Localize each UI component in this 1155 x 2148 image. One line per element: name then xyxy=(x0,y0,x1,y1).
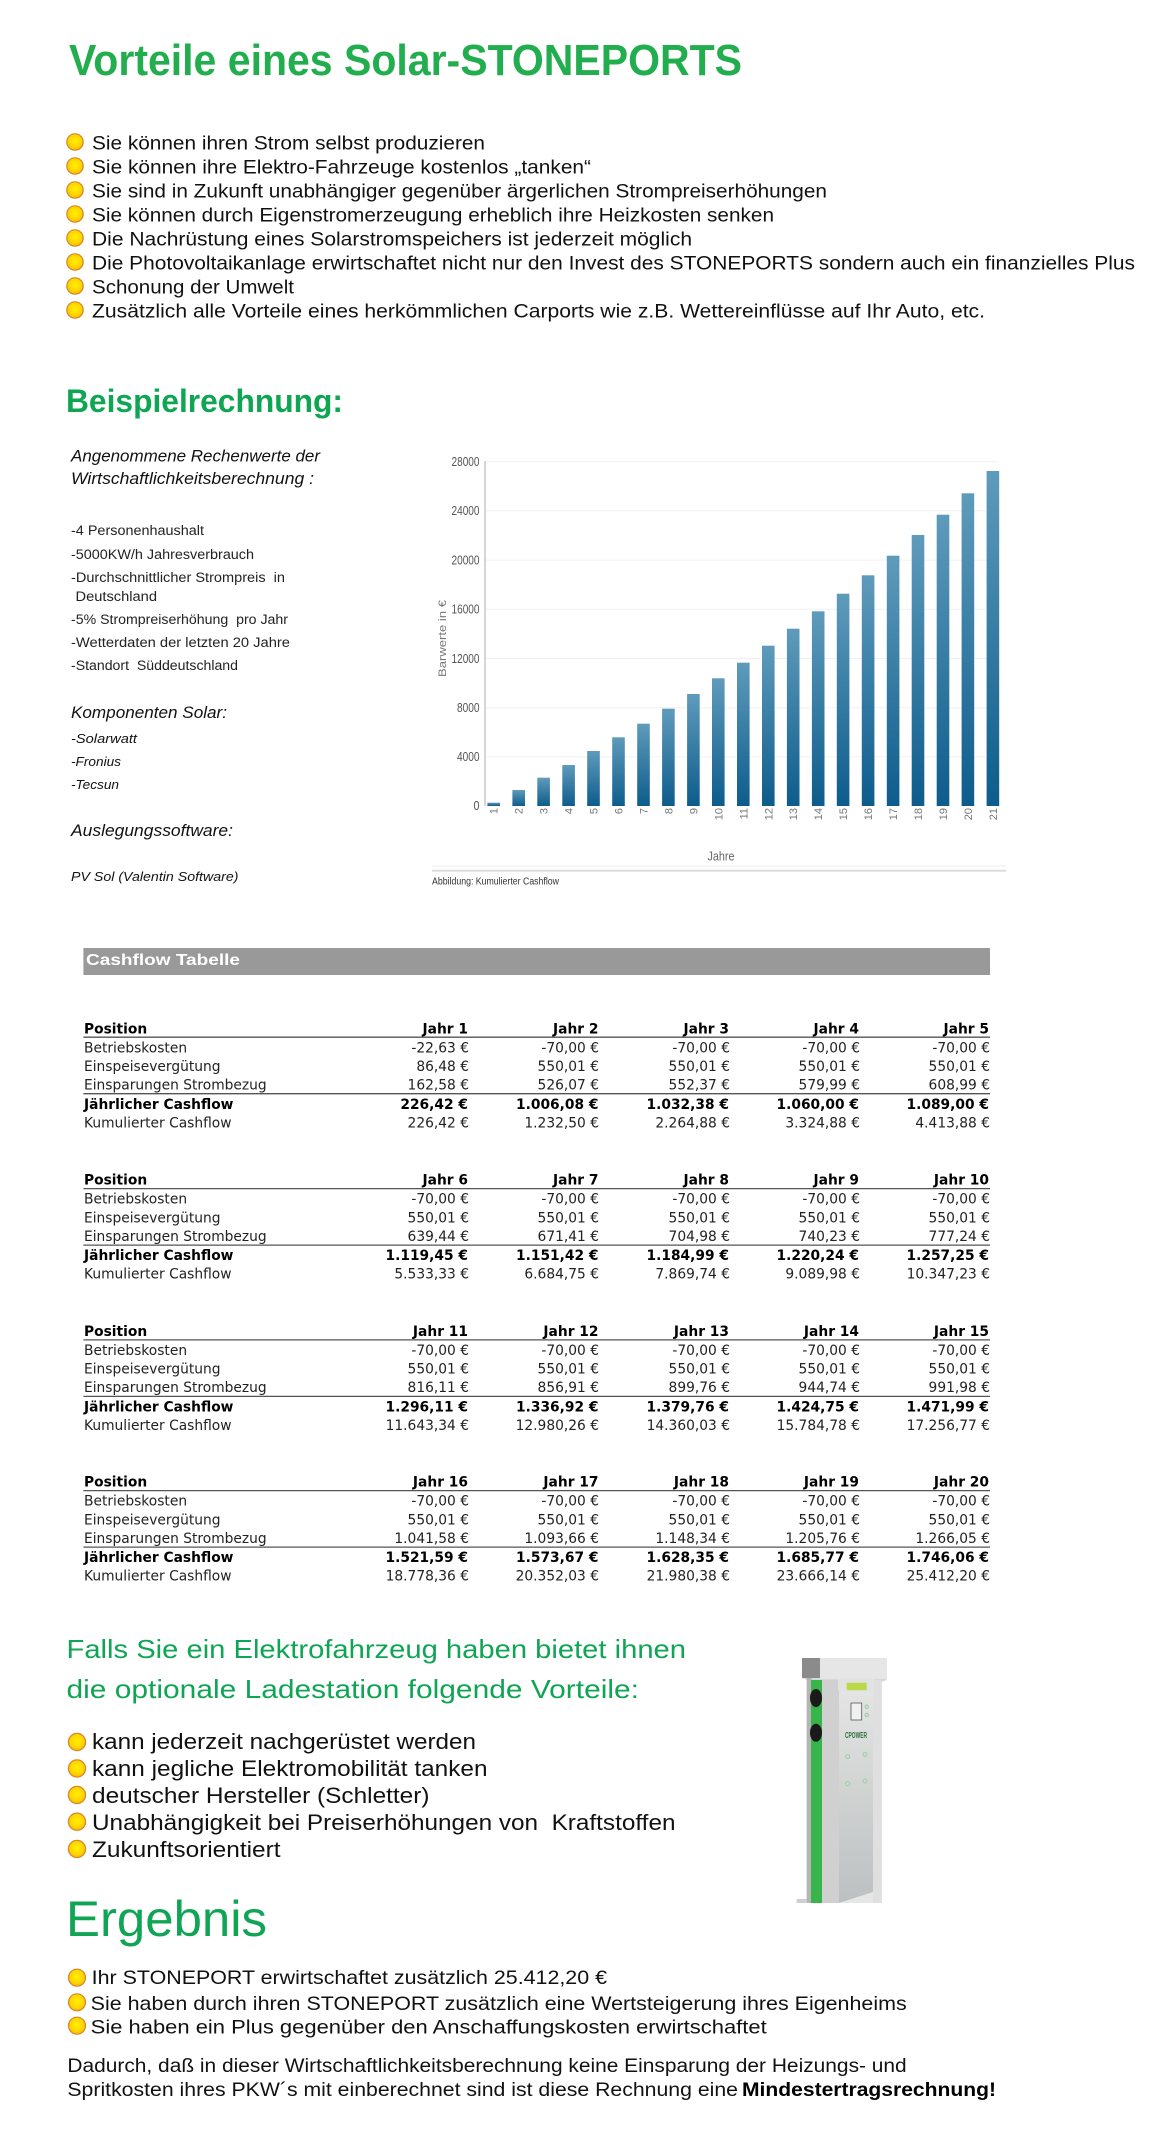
table: years 1 to 5: Jahr 2 xyxy=(552,1021,598,1037)
table: years 11 to 15: Einsparungen Strombezug xyxy=(84,1380,267,1396)
icon: bullet xyxy=(68,1969,86,1986)
x axis labels: 7 xyxy=(638,808,650,814)
x axis labels: 17 xyxy=(888,808,900,820)
benefit text: Sie sind in Zukunft unabhängiger gegenüber ärgerlichen Strompreiserhöhungen xyxy=(92,180,827,202)
y axis labels: 0 xyxy=(474,799,480,813)
table: years 11 to 15 xyxy=(83,1324,990,1434)
table: years 1 to 5: -22,63 € xyxy=(411,1040,469,1056)
assumption: -4 Personenhaushalt xyxy=(71,523,204,538)
table: years 1 to 5: 2.264,88 € xyxy=(655,1115,730,1131)
assumption: -Durchschnittlicher Strompreis in xyxy=(71,570,285,585)
list: results xyxy=(68,1967,907,2038)
table: years 16 to 20: Jahr 16 xyxy=(412,1475,468,1491)
x axis labels: 2 xyxy=(514,808,526,814)
x axis labels: 8 xyxy=(663,808,675,814)
display xyxy=(838,1678,874,1692)
table: years 1 to 5: Jahr 5 xyxy=(943,1021,989,1037)
x axis labels: 6 xyxy=(614,808,626,814)
table: years 11 to 15: Kumulierter Cashflow xyxy=(84,1418,232,1434)
software name: PV Sol (Valentin Software) xyxy=(71,869,238,884)
icon: bullet xyxy=(67,230,83,246)
table: years 1 to 5: Jahr 3 xyxy=(683,1021,729,1037)
table: years 1 to 5: 86,48 € xyxy=(416,1059,469,1075)
x axis labels: 10 xyxy=(713,808,725,820)
table: years 11 to 15: 991,98 € xyxy=(929,1380,990,1396)
table: years 6 to 10: 5.533,33 € xyxy=(394,1267,469,1283)
table: years 6 to 10: -70,00 € xyxy=(932,1192,990,1208)
card reader xyxy=(851,1703,862,1720)
assumptions heading line 2: Wirtschaftlichkeitsberechnung : xyxy=(71,469,314,488)
conclusion text: Mindestertragsrechnung! xyxy=(742,2080,996,2101)
component: -Fronius xyxy=(71,754,122,769)
table: years 11 to 15: 14.360,03 € xyxy=(647,1418,730,1434)
table: years 11 to 15: 1.471,99 € xyxy=(906,1400,989,1416)
icon: bullet xyxy=(68,1813,86,1830)
table: years 16 to 20: -70,00 € xyxy=(541,1494,599,1510)
icon: bullet xyxy=(68,1786,86,1804)
table: years 1 to 5: 3.324,88 € xyxy=(785,1115,860,1131)
bar chart: cumulative cashflow xyxy=(432,455,1006,888)
table: years 11 to 15: 1.296,11 € xyxy=(386,1400,468,1416)
table: years 16 to 20: 1.041,58 € xyxy=(394,1531,469,1547)
table: years 16 to 20: -70,00 € xyxy=(932,1494,990,1510)
icon: bullet xyxy=(68,1994,86,2011)
y axis labels: 16000 xyxy=(452,603,480,617)
table: years 1 to 5: -70,00 € xyxy=(541,1040,599,1056)
table: years 1 to 5: 1.060,00 € xyxy=(776,1097,859,1113)
table: years 6 to 10: Jährlicher Cashflow xyxy=(83,1248,234,1264)
heading: Ergebnis: Ergebnis xyxy=(66,1891,267,1947)
table: years 6 to 10: 550,01 € xyxy=(669,1210,730,1226)
icon: bullet xyxy=(68,2017,86,2034)
table: years 6 to 10: 1.220,24 € xyxy=(776,1248,859,1264)
table: years 11 to 15: 1.336,92 € xyxy=(516,1400,598,1416)
image: charging station xyxy=(797,1658,887,1903)
table: years 1 to 5: -70,00 € xyxy=(932,1040,990,1056)
table: years 11 to 15: 944,74 € xyxy=(799,1380,860,1396)
table: years 6 to 10: -70,00 € xyxy=(802,1192,860,1208)
result text: Sie haben durch ihren STONEPORT zusätzlich eine Wertsteigerung ihres Eigenheims xyxy=(91,1993,907,2015)
table: years 11 to 15: Betriebskosten xyxy=(84,1343,187,1359)
table: years 16 to 20: 18.778,36 € xyxy=(386,1569,469,1585)
table: years 11 to 15: Jahr 14 xyxy=(803,1324,859,1340)
icon: bullet xyxy=(67,134,83,150)
table: years 1 to 5 xyxy=(83,1021,990,1131)
table: years 11 to 15: 1.379,76 € xyxy=(646,1400,729,1416)
table: years 16 to 20: 1.628,35 € xyxy=(646,1550,729,1566)
heading: Beispielrechnung: Beispielrechnung: xyxy=(66,383,343,419)
benefit text: deutscher Hersteller (Schletter) xyxy=(92,1783,430,1808)
benefit text: Sie können ihren Strom selbst produzieren xyxy=(92,132,485,154)
icon: bullet xyxy=(67,158,83,174)
x axis labels: 15 xyxy=(838,808,850,820)
table: years 16 to 20: 21.980,38 € xyxy=(647,1569,730,1585)
table header bar: Cashflow Tabelle xyxy=(86,952,240,969)
icon: bullet xyxy=(68,1733,86,1751)
assumptions heading: Angenommene Rechenwerte der xyxy=(70,447,321,466)
table: years 6 to 10: 7.869,74 € xyxy=(655,1267,730,1283)
table: years 6 to 10: 10.347,23 € xyxy=(907,1267,990,1283)
y axis title: Barwerte in € xyxy=(437,600,449,677)
table: years 16 to 20: 1.266,05 € xyxy=(915,1531,990,1547)
table: years 11 to 15: 550,01 € xyxy=(799,1362,860,1378)
table: years 1 to 5: 579,99 € xyxy=(799,1078,860,1094)
table: years 1 to 5: 226,42 € xyxy=(400,1097,468,1113)
table: years 6 to 10: Position xyxy=(84,1173,147,1189)
table: years 1 to 5: Position xyxy=(84,1021,147,1037)
table: years 16 to 20: -70,00 € xyxy=(672,1494,730,1510)
table: years 6 to 10: Betriebskosten xyxy=(84,1192,187,1208)
table: years 1 to 5: 550,01 € xyxy=(669,1059,730,1075)
icon: bullet xyxy=(67,182,83,198)
x axis labels: 21 xyxy=(988,808,1000,820)
table: years 11 to 15: Jährlicher Cashflow xyxy=(83,1400,234,1416)
result text: Ihr STONEPORT erwirtschaftet zusätzlich 25.412,20 € xyxy=(92,1967,607,1989)
table: years 16 to 20: 1.093,66 € xyxy=(524,1531,599,1547)
table: years 1 to 5: 1.232,50 € xyxy=(524,1115,599,1131)
table: years 6 to 10: Einsparungen Strombezug xyxy=(84,1229,267,1245)
table: years 6 to 10: Jahr 8 xyxy=(683,1173,729,1189)
benefit text: Die Photovoltaikanlage erwirtschaftet nicht nur den Invest des STONEPORTS sondern auch ein finanzielles Plus xyxy=(92,252,1135,274)
sockets xyxy=(810,1689,822,1742)
table: years 16 to 20: -70,00 € xyxy=(802,1494,860,1510)
y axis labels: 4000 xyxy=(457,750,480,764)
table: years 6 to 10: 740,23 € xyxy=(799,1229,860,1245)
table: years 11 to 15: -70,00 € xyxy=(541,1343,599,1359)
table: years 11 to 15: 550,01 € xyxy=(929,1362,990,1378)
table: years 16 to 20: Jahr 17 xyxy=(542,1475,598,1491)
table: years 16 to 20: 1.521,59 € xyxy=(386,1550,468,1566)
benefit text: Die Nachrüstung eines Solarstromspeichers ist jederzeit möglich xyxy=(92,228,692,250)
title: Vorteile eines Solar-STONEPORTS xyxy=(69,36,742,85)
table: years 11 to 15: Jahr 11 xyxy=(412,1324,468,1340)
table: years 11 to 15: Jahr 12 xyxy=(542,1324,598,1340)
components heading: Komponenten Solar: xyxy=(71,703,227,722)
table: years 6 to 10: 550,01 € xyxy=(538,1210,599,1226)
table: years 1 to 5: 4.413,88 € xyxy=(915,1115,990,1131)
table: years 1 to 5: Einspeisevergütung xyxy=(84,1059,220,1075)
table: years 1 to 5: -70,00 € xyxy=(672,1040,730,1056)
panel: assumptions text xyxy=(70,447,321,884)
table: years 6 to 10: 6.684,75 € xyxy=(524,1267,599,1283)
chart caption: Abbildung: Kumulierter Cashflow xyxy=(432,877,560,888)
x axis title: Jahre xyxy=(708,850,735,864)
y axis labels: 12000 xyxy=(452,652,480,666)
benefit text: kann jederzeit nachgerüstet werden xyxy=(92,1729,476,1754)
x axis labels: 14 xyxy=(813,808,825,820)
table: years 11 to 15: 550,01 € xyxy=(408,1362,469,1378)
table: years 16 to 20: -70,00 € xyxy=(411,1494,469,1510)
x axis labels xyxy=(489,808,1000,820)
y axis labels xyxy=(452,455,480,813)
table: years 16 to 20: Einsparungen Strombezug xyxy=(84,1531,267,1547)
table: years 1 to 5: 226,42 € xyxy=(408,1115,469,1131)
y axis labels: 24000 xyxy=(452,504,480,518)
table: years 11 to 15: 816,11 € xyxy=(408,1380,469,1396)
conclusion text: Spritkosten ihres PKW´s mit einberechnet sind ist diese Rechnung eine xyxy=(67,2080,738,2101)
bars xyxy=(487,471,999,806)
table: years 1 to 5: 550,01 € xyxy=(538,1059,599,1075)
table: years 11 to 15: 899,76 € xyxy=(669,1380,730,1396)
table: years 16 to 20: Jährlicher Cashflow xyxy=(83,1550,234,1566)
table: years 6 to 10: 1.257,25 € xyxy=(906,1248,989,1264)
table: years 1 to 5: 550,01 € xyxy=(929,1059,990,1075)
table: years 6 to 10: 9.089,98 € xyxy=(785,1267,860,1283)
table: years 16 to 20: 1.685,77 € xyxy=(776,1550,859,1566)
x axis labels: 5 xyxy=(588,808,600,814)
table: years 11 to 15: Einspeisevergütung xyxy=(84,1362,220,1378)
table: years 11 to 15: 856,91 € xyxy=(538,1380,599,1396)
table: years 11 to 15: -70,00 € xyxy=(932,1343,990,1359)
icon: bullet xyxy=(67,302,83,318)
benefit text: Zukunftsorientiert xyxy=(92,1837,280,1862)
table: years 6 to 10: 550,01 € xyxy=(929,1210,990,1226)
conclusion text xyxy=(67,2056,996,2101)
benefit text: kann jegliche Elektromobilität tanken xyxy=(92,1756,488,1781)
table: years 11 to 15: 550,01 € xyxy=(669,1362,730,1378)
table header bar xyxy=(83,948,990,975)
conclusion text: Dadurch, daß in dieser Wirtschaftlichkeitsberechnung keine Einsparung der Heizungs- und xyxy=(67,2056,907,2077)
x axis labels: 13 xyxy=(788,808,800,820)
y axis labels: 28000 xyxy=(452,455,480,469)
table: years 6 to 10: 639,44 € xyxy=(408,1229,469,1245)
table: years 6 to 10: 704,98 € xyxy=(669,1229,730,1245)
x axis labels: 3 xyxy=(539,808,551,814)
x axis labels: 1 xyxy=(489,808,501,814)
table: years 1 to 5: 1.032,38 € xyxy=(646,1097,729,1113)
table: years 6 to 10: Kumulierter Cashflow xyxy=(84,1267,232,1283)
table: years 1 to 5: Einsparungen Strombezug xyxy=(84,1078,267,1094)
assumption: -5% Strompreiserhöhung pro Jahr xyxy=(71,612,289,627)
list: charging station benefits xyxy=(68,1729,675,1862)
logo: CPOWER xyxy=(845,1731,867,1740)
x axis labels: 19 xyxy=(938,808,950,820)
benefit text: Sie können ihre Elektro-Fahrzeuge kostenlos „tanken“ xyxy=(92,156,591,178)
table: years 6 to 10: Jahr 9 xyxy=(813,1173,859,1189)
table: years 1 to 5: Kumulierter Cashflow xyxy=(84,1115,232,1131)
table: years 1 to 5: Jährlicher Cashflow xyxy=(83,1097,234,1113)
table: years 11 to 15: 1.424,75 € xyxy=(776,1400,859,1416)
table: years 16 to 20: 550,01 € xyxy=(538,1512,599,1528)
y axis labels: 20000 xyxy=(452,553,480,567)
table: years 1 to 5: 608,99 € xyxy=(929,1078,990,1094)
table: years 6 to 10: 1.151,42 € xyxy=(516,1248,598,1264)
table: years 1 to 5: Jahr 4 xyxy=(813,1021,859,1037)
table: years 16 to 20: Einspeisevergütung xyxy=(84,1512,220,1528)
x axis labels: 16 xyxy=(863,808,875,820)
table: years 16 to 20: 1.746,06 € xyxy=(906,1550,989,1566)
table: years 6 to 10: Jahr 10 xyxy=(933,1173,989,1189)
table: years 6 to 10: Jahr 6 xyxy=(422,1173,468,1189)
benefit text: Zusätzlich alle Vorteile eines herkömmlichen Carports wie z.B. Wettereinflüsse auf Ihr Auto, etc. xyxy=(92,300,985,322)
table: years 1 to 5: Betriebskosten xyxy=(84,1040,187,1056)
table: years 1 to 5: 526,07 € xyxy=(538,1078,599,1094)
assumption: -5000KW/h Jahresverbrauch xyxy=(71,547,254,562)
table: years 16 to 20: 550,01 € xyxy=(408,1512,469,1528)
heading: charging station: Falls Sie ein Elektrofahrzeug haben bietet ihnen xyxy=(66,1634,686,1664)
green strip xyxy=(811,1680,822,1903)
table: years 16 to 20: 550,01 € xyxy=(929,1512,990,1528)
table: years 11 to 15: -70,00 € xyxy=(411,1343,469,1359)
table: years 6 to 10: 777,24 € xyxy=(929,1229,990,1245)
result text: Sie haben ein Plus gegenüber den Anschaffungskosten erwirtschaftet xyxy=(91,2016,767,2038)
table: years 16 to 20: 550,01 € xyxy=(669,1512,730,1528)
table: years 16 to 20 xyxy=(83,1475,990,1585)
table: years 16 to 20: 23.666,14 € xyxy=(777,1569,860,1585)
benefit text: Unabhängigkeit bei Preiserhöhungen von Kraftstoffen xyxy=(92,1810,676,1835)
table: years 6 to 10: -70,00 € xyxy=(541,1192,599,1208)
table: years 6 to 10: 550,01 € xyxy=(408,1210,469,1226)
table: years 11 to 15: Jahr 15 xyxy=(933,1324,989,1340)
table: years 6 to 10: Einspeisevergütung xyxy=(84,1210,220,1226)
table: years 16 to 20: Betriebskosten xyxy=(84,1494,187,1510)
table: years 11 to 15: 17.256,77 € xyxy=(907,1418,990,1434)
table: years 1 to 5: 1.006,08 € xyxy=(516,1097,598,1113)
table: years 16 to 20: 25.412,20 € xyxy=(907,1569,990,1585)
x axis labels: 9 xyxy=(688,808,700,814)
x axis labels: 11 xyxy=(738,808,750,819)
table: years 1 to 5: -70,00 € xyxy=(802,1040,860,1056)
table: years 6 to 10: Jahr 7 xyxy=(552,1173,598,1189)
table: years 11 to 15: Position xyxy=(84,1324,147,1340)
heading: charging station xyxy=(66,1634,686,1704)
table: years 16 to 20: 550,01 € xyxy=(799,1512,860,1528)
table: years 6 to 10: 671,41 € xyxy=(538,1229,599,1245)
icon: bullet xyxy=(67,278,83,294)
table: years 11 to 15: 550,01 € xyxy=(538,1362,599,1378)
table: years 16 to 20: Kumulierter Cashflow xyxy=(84,1569,232,1585)
icon: bullet xyxy=(67,254,83,270)
table: years 1 to 5: Jahr 1 xyxy=(422,1021,468,1037)
table: years 11 to 15: Jahr 13 xyxy=(673,1324,729,1340)
table: years 16 to 20: Jahr 18 xyxy=(673,1475,729,1491)
table: years 1 to 5: 550,01 € xyxy=(799,1059,860,1075)
assumption continued: Deutschland xyxy=(76,589,157,604)
table: years 1 to 5: 552,37 € xyxy=(669,1078,730,1094)
assumption: -Wetterdaten der letzten 20 Jahre xyxy=(71,635,290,650)
table: years 6 to 10: 1.119,45 € xyxy=(386,1248,468,1264)
software heading: Auslegungssoftware: xyxy=(70,821,233,840)
component: -Solarwatt xyxy=(71,731,139,746)
table: years 16 to 20: Jahr 20 xyxy=(933,1475,989,1491)
table: years 16 to 20: 1.205,76 € xyxy=(785,1531,860,1547)
icon: bullet xyxy=(68,1840,86,1858)
benefit text: Sie können durch Eigenstromerzeugung erheblich ihre Heizkosten senken xyxy=(92,204,774,226)
table: years 1 to 5: 1.089,00 € xyxy=(906,1097,989,1113)
icon: bullet xyxy=(67,206,83,222)
component: -Tecsun xyxy=(71,777,119,792)
table: years 16 to 20: Position xyxy=(84,1475,147,1491)
table: years 11 to 15: -70,00 € xyxy=(672,1343,730,1359)
benefit text: Schonung der Umwelt xyxy=(92,276,295,298)
assumption: -Standort Süddeutschland xyxy=(71,658,238,673)
heading: charging station: die optionale Ladestation folgende Vorteile: xyxy=(66,1674,639,1704)
table: years 1 to 5: 162,58 € xyxy=(408,1078,469,1094)
list: solar benefits xyxy=(67,132,1135,322)
x axis labels: 12 xyxy=(763,808,775,820)
x axis labels: 18 xyxy=(913,808,925,820)
table: years 11 to 15: 11.643,34 € xyxy=(386,1418,469,1434)
table: years 16 to 20: 1.148,34 € xyxy=(655,1531,730,1547)
icon: bullet xyxy=(68,1760,86,1777)
table: years 6 to 10: 550,01 € xyxy=(799,1210,860,1226)
x axis labels: 20 xyxy=(963,808,975,820)
table: years 6 to 10: -70,00 € xyxy=(672,1192,730,1208)
table: years 11 to 15: -70,00 € xyxy=(802,1343,860,1359)
table: years 6 to 10: 1.184,99 € xyxy=(646,1248,729,1264)
y axis labels: 8000 xyxy=(457,701,480,715)
table: years 16 to 20: 20.352,03 € xyxy=(516,1569,599,1585)
table: years 16 to 20: 1.573,67 € xyxy=(516,1550,598,1566)
table: years 11 to 15: 12.980,26 € xyxy=(516,1418,599,1434)
table: years 16 to 20: Jahr 19 xyxy=(803,1475,859,1491)
table: years 6 to 10: -70,00 € xyxy=(411,1192,469,1208)
x axis labels: 4 xyxy=(564,808,576,814)
indicator dots xyxy=(846,1705,868,1786)
table: years 6 to 10 xyxy=(83,1173,990,1283)
table: years 11 to 15: 15.784,78 € xyxy=(777,1418,860,1434)
